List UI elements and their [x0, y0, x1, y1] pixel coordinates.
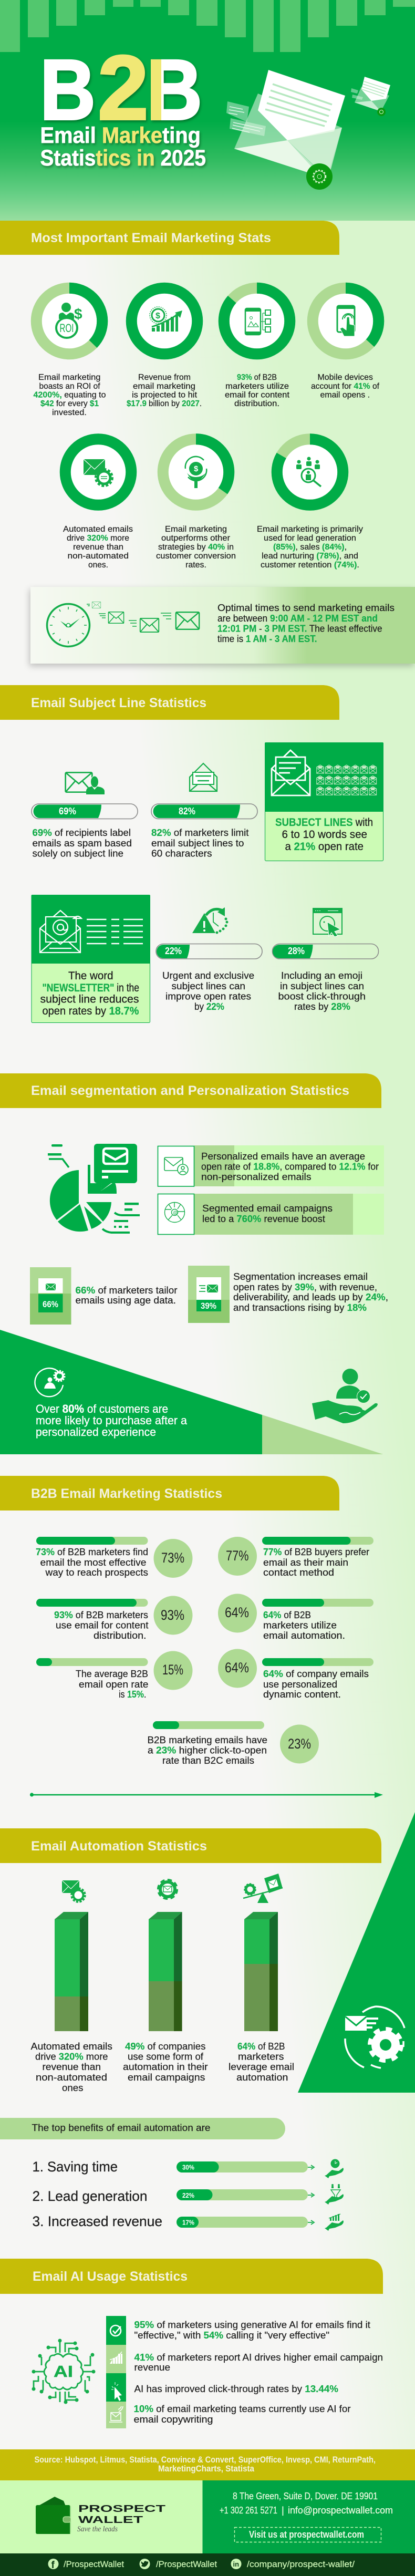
text [202, 1203, 333, 1224]
title: 2 [98, 36, 149, 139]
text [127, 373, 202, 408]
stat: 69% spam [32, 772, 138, 858]
stat: 15% open rate: is 15%. [119, 1689, 146, 1700]
callout: optimal send times [30, 587, 415, 664]
benefit: lead generation [33, 2184, 344, 2205]
heading: most important stats: Most Important Email Marketing Stats [31, 231, 271, 245]
stat: 73% reach prospects: email the most effective [40, 1557, 146, 1568]
text [156, 525, 236, 570]
text: 12:01 PM - 3 PM EST. The least effective [217, 623, 382, 634]
icon: ROI person [56, 303, 82, 338]
stat: 64% automation: marketers utilize [263, 1620, 337, 1631]
stat: 15% open rate: The average B2B [76, 1669, 148, 1679]
text: open rate of 18.8%, compared to 12.1% for [201, 1161, 379, 1172]
icon: phone with nodes [245, 308, 271, 335]
text: non-automated [36, 2072, 107, 2083]
text: account for 41% of [311, 382, 380, 391]
icon: growth chart [110, 2352, 122, 2364]
text: outperforms other [161, 534, 231, 543]
heading: segmentation: Email segmentation and Personalization Statistics [31, 1083, 349, 1098]
icon: coin and growth arrow: $ [155, 312, 160, 320]
icon: globe at sign [165, 1202, 185, 1222]
text: age data: 66% of marketers tailor [76, 1285, 178, 1296]
stat: 64% dynamic content: dynamic content. [263, 1689, 341, 1700]
text: Mobile devices [317, 373, 373, 382]
icon: envelope person [164, 1157, 188, 1175]
text: rates by 28% [294, 1001, 350, 1012]
text: emails as spam based [33, 838, 132, 849]
text [33, 827, 132, 858]
benefit: lead generation: 22% [182, 2191, 194, 2199]
icon: wallet logo [36, 2497, 71, 2534]
text [311, 373, 380, 399]
title: B [40, 42, 96, 138]
text: AI stats: AI has improved click-through rates by 13.44% [134, 2384, 338, 2394]
text: 82% of marketers limit [151, 827, 249, 838]
text: Email marketing [38, 373, 101, 382]
text: email marketing [133, 382, 195, 391]
donut stat: primary uses [257, 439, 363, 570]
text: 60 characters [151, 848, 212, 858]
text: in subject lines can [280, 981, 364, 991]
text: automation [236, 2072, 288, 2083]
text: Urgent and exclusive [162, 970, 254, 981]
text: improve open rates [165, 991, 251, 1001]
text: subject line reduces [40, 993, 139, 1006]
footer: social bar: /company/prospect-wallet/ [247, 2559, 355, 2569]
title: Statistics in 2025 [40, 146, 206, 171]
button: visit us [234, 2527, 381, 2542]
text: subject lines can [171, 981, 245, 991]
progress bar [151, 804, 257, 819]
text: email subject lines to [151, 838, 244, 849]
card: newsletter word [32, 895, 150, 1022]
footer: contact panel: 8 The Green, Suite D, Dover. DE 19901 [233, 2491, 378, 2501]
heading: most important stats [0, 221, 339, 255]
card: subject line length [265, 742, 383, 861]
text: lead nurturing (78%), and [262, 552, 358, 561]
icon: linkedin: in [233, 2560, 239, 2568]
banner: top benefits: The top benefits of email automation are [32, 2123, 210, 2133]
footer: logo panel [0, 2480, 203, 2553]
text [162, 970, 254, 1012]
icon: envelope gear [62, 1880, 85, 1902]
source bar [0, 2449, 415, 2480]
stat: 23% click-to-open: 23% [288, 1736, 311, 1752]
text: 49% of companies [125, 2041, 206, 2052]
text [123, 2041, 208, 2083]
chart: automation bar 3 [229, 1874, 294, 2083]
text: Segmented email campaigns [202, 1203, 333, 1214]
stat: 22% urgent [156, 907, 262, 1012]
stat card: 39% segmentation [188, 1266, 230, 1323]
stat: 93% content distribution: use email for content [56, 1620, 148, 1631]
stat: 77% buyers prefer: email as their main [263, 1557, 348, 1568]
progress bar: 82% [179, 806, 195, 816]
text: personalized experience [36, 1425, 156, 1439]
stat: 64% dynamic content: 64% [225, 1660, 249, 1675]
text [40, 969, 139, 1017]
logo wordmark: WALLET [78, 2515, 143, 2525]
text: 93% of B2B [237, 373, 277, 382]
icon: coin and growth arrow [150, 307, 182, 332]
text: age data [76, 1285, 178, 1306]
text: email for content [225, 391, 290, 399]
text: The word [68, 969, 113, 982]
text: is projected to hit [132, 391, 198, 399]
progress bar [272, 944, 378, 959]
icon: large envelope [272, 750, 310, 795]
text: non-personalized emails [201, 1172, 311, 1182]
stat: 64% automation: email automation. [263, 1630, 345, 1641]
text: by 22% [194, 1001, 224, 1012]
stat: 93% content distribution: 93% of B2B marketers [54, 1610, 148, 1620]
icon: ROI person: ROI [60, 322, 74, 335]
text: boasts an ROI of [39, 382, 100, 391]
text: leverage email [229, 2062, 294, 2072]
text: Automated emails [63, 525, 133, 534]
text: open rates by 18.7% [42, 1005, 139, 1017]
text: 69% of recipients label [33, 827, 131, 838]
heading: AI usage [0, 2259, 383, 2294]
chart: automation bar 1 [30, 1880, 112, 2093]
benefit: saving time: 1. Saving time [33, 2159, 118, 2175]
icon: open envelope [190, 763, 217, 791]
heading: subject line [0, 685, 339, 720]
stat: 28% emoji [272, 908, 378, 1012]
heading: subject line: Email Subject Line Statistics [31, 696, 206, 710]
benefit: lead generation: 2. Lead generation [33, 2188, 147, 2204]
heading: B2B statistics [0, 1476, 339, 1511]
title: B [147, 42, 202, 138]
icon: grid of envelopes [316, 764, 378, 795]
text: solely on subject line [33, 848, 123, 858]
text: Email marketing is primarily [257, 525, 363, 534]
text: strategies by 40% in [158, 543, 234, 552]
icon: envelope broadcast [109, 2406, 123, 2422]
stat: 15% open rate: email open rate [79, 1679, 148, 1690]
title: Email Marketing [40, 123, 201, 148]
icon: hand and chart [325, 2214, 344, 2231]
illustration: pie chart and message [48, 1144, 140, 1233]
logo wordmark: PROSPECT [78, 2503, 165, 2514]
stat: 23% click-to-open: a 23% higher click-to-open [148, 1745, 267, 1756]
stat: 23% click-to-open: B2B marketing emails have [147, 1735, 267, 1745]
icon: funnel coin: $ [194, 464, 199, 473]
text: AI stats: email copywriting [133, 2414, 213, 2425]
text [201, 1151, 379, 1182]
text: age data: emails using age data. [76, 1295, 176, 1306]
stat: 15% open rate: 15% [162, 1662, 183, 1678]
footer: social bar: /ProspectWallet [156, 2559, 217, 2569]
text: drive 320% more [35, 2052, 108, 2062]
footer: contact panel [203, 2480, 415, 2553]
footer: social bar: /ProspectWallet [64, 2559, 124, 2569]
icon: AI brain circuit [32, 2339, 96, 2404]
text: marketers utilize [225, 382, 289, 391]
button: visit us: Visit us at prospectwallet.com [249, 2529, 364, 2540]
arrow [30, 1792, 383, 1798]
progress bar [156, 944, 262, 959]
icon: globe at sign: @ [173, 1210, 178, 1215]
icon: hand and clock [325, 2159, 344, 2178]
icon: person and gear [35, 1368, 65, 1396]
text: 6 to 10 words see [282, 828, 367, 841]
heading: automation [0, 1828, 381, 1863]
icon: facebook [48, 2559, 59, 2571]
benefit: increased revenue [33, 2213, 344, 2231]
strip: AI stat icons [106, 2316, 126, 2428]
stat: 64% automation: 64% of B2B [263, 1610, 311, 1620]
donut stat: conversion [156, 439, 236, 570]
text: led to a 760% revenue boost [202, 1214, 325, 1224]
icon: facebook: f [51, 2560, 55, 2571]
icon: AI brain circuit: AI [54, 2362, 73, 2381]
icon: ROI person: $ [74, 306, 82, 322]
text: marketers [238, 2052, 284, 2062]
stat: 93% content distribution: distribution. [94, 1630, 146, 1641]
stat: 73% reach prospects: 73% of B2B marketers find [36, 1547, 148, 1557]
text: invested. [52, 408, 87, 417]
progress bar: 28% [288, 946, 305, 956]
text: time is 1 AM - 3 AM EST. [217, 634, 317, 644]
footer: contact panel: | [282, 2505, 284, 2516]
text: Personalized emails have an average [201, 1151, 365, 1162]
donut stat: mobile [311, 288, 380, 399]
icon: clock [47, 604, 89, 646]
text: boost click-through [278, 991, 366, 1001]
icon: envelope [46, 1284, 56, 1290]
text: Optimal times to send marketing emails [217, 603, 395, 613]
text [34, 373, 106, 417]
benefit: increased revenue: 3. Increased revenue [33, 2213, 162, 2229]
benefit: increased revenue: 17% [182, 2218, 194, 2227]
text: $17.9 billion by 2027. [127, 399, 202, 408]
logo wordmark [77, 2503, 165, 2533]
icon: flying envelopes [87, 602, 199, 632]
text: segmentation lift: deliverability, and leads up by 24%, [233, 1292, 388, 1302]
icon: twitter [140, 2559, 150, 2569]
stat: 77% buyers prefer [218, 1537, 374, 1578]
icon: phone touch [337, 306, 355, 336]
text: segmentation lift: and transactions rising by 18% [233, 1302, 367, 1313]
text: customer conversion [156, 552, 236, 561]
heading: B2B statistics: B2B Email Marketing Statistics [31, 1486, 222, 1501]
icon: lines and envelope [207, 1285, 218, 1292]
text: a 21% open rate [285, 840, 364, 853]
text: non-automated [67, 552, 129, 561]
stat card: 39% segmentation: 39% [201, 1301, 216, 1311]
stat: 73% reach prospects [36, 1537, 192, 1578]
illustration: open envelope [226, 70, 390, 190]
text: Email marketing [165, 525, 227, 534]
stat: 64% automation [218, 1594, 374, 1641]
text: SUBJECT LINES with [275, 816, 373, 829]
benefit: saving time: 30% [182, 2164, 194, 2171]
benefit: saving time [33, 2159, 344, 2178]
stat: 77% buyers prefer: contact method [263, 1567, 334, 1578]
text: AI stats: revenue [134, 2362, 170, 2373]
text: AI stats: 95% of marketers using generative AI for emails find it [134, 2320, 370, 2330]
chart: automation bar 2 [123, 1880, 208, 2083]
progress bar: 69% [59, 806, 76, 816]
text: segmentation lift: open rates by 39%, with revenue, [233, 1282, 377, 1292]
text [229, 2041, 294, 2083]
icon: gear with envelope [159, 1880, 177, 1898]
stat: 77% buyers prefer: 77% [226, 1548, 249, 1564]
heading: segmentation [0, 1073, 381, 1108]
text: distribution. [234, 399, 279, 408]
progress bar [32, 804, 138, 819]
text: AI stats: 41% of marketers report AI drives higher email campaign [134, 2352, 383, 2363]
icon: click cursor [111, 2382, 122, 2401]
text: ones. [88, 561, 108, 570]
stat: 73% reach prospects: 73% [161, 1550, 184, 1566]
stat: 64% dynamic content: 64% of company emails [263, 1669, 369, 1679]
title [40, 36, 206, 171]
footer: contact panel: info@prospectwallet.com [288, 2505, 393, 2516]
text: revenue than [73, 543, 123, 552]
text [36, 1402, 188, 1439]
text [278, 970, 366, 1012]
text: rates. [185, 561, 206, 570]
text [151, 827, 249, 858]
stat: 64% automation: 64% [225, 1605, 249, 1620]
icon: funnel coin [185, 457, 206, 488]
icon: envelope and gear [345, 2006, 404, 2068]
stat: 73% reach prospects: way to reach prospects [45, 1567, 148, 1578]
text: (85%), sales (84%), [273, 543, 347, 552]
icon: at envelope and lines [40, 911, 143, 953]
text: Over 80% of customers are [36, 1402, 168, 1415]
stat: 82% characters [151, 763, 257, 858]
text: AI stats: 10% of email marketing teams currently use AI for [133, 2404, 351, 2414]
text: AI stats: "effective," with 54% calling it "very effective" [134, 2330, 329, 2341]
decorative bars [0, 0, 415, 52]
stat: 93% content distribution: 93% [161, 1607, 184, 1623]
stat: 23% click-to-open: rate than B2C emails [162, 1755, 254, 1766]
text: 4200%, equating to [34, 391, 106, 399]
hero header [0, 0, 415, 221]
text: segmentation lift [233, 1271, 388, 1313]
text: Revenue from [138, 373, 191, 382]
icon: envelope and gear [84, 459, 112, 486]
text [63, 525, 133, 570]
text: automation in their [123, 2062, 208, 2072]
stat: 64% dynamic content: use personalized [263, 1679, 337, 1690]
stat: 15% open rate [36, 1651, 192, 1700]
icon: linkedin [231, 2559, 242, 2569]
text: 64% of B2B [237, 2041, 285, 2052]
text: customer retention (74%). [261, 561, 359, 570]
text: "NEWSLETTER" in the [42, 981, 139, 994]
panel: automation triangle [298, 1812, 415, 2093]
donut stat: revenue [127, 288, 202, 408]
icon: warning clock [192, 907, 228, 934]
text: used for lead generation [264, 534, 356, 543]
text: $42 for every $1 [40, 399, 99, 408]
progress bar: 22% [165, 946, 182, 956]
text: ones [62, 2083, 83, 2093]
icon: browser with cursor [313, 908, 342, 937]
heading: AI usage: Email AI Usage Statistics [33, 2269, 188, 2284]
stat: 64% dynamic content [218, 1649, 374, 1700]
callout: segmented campaigns [158, 1194, 384, 1235]
text: email campaigns [128, 2072, 205, 2083]
heading: automation: Email Automation Statistics [31, 1839, 207, 1854]
donut stat: automated emails [63, 439, 133, 570]
text: use some form of [128, 2052, 204, 2062]
text [257, 525, 363, 570]
icon: hand and funnel [325, 2184, 344, 2205]
text: email opens . [320, 391, 370, 399]
panel: personalized experience triangle [0, 1330, 383, 1454]
stat: 23% click-to-open [147, 1721, 319, 1766]
icon: people and magnifier [296, 457, 321, 487]
stat: 93% content distribution [36, 1596, 192, 1641]
text [217, 603, 395, 644]
footer: contact panel: +1 302 261 5271 [220, 2505, 277, 2516]
text: segmentation lift: Segmentation increases email [233, 1271, 368, 1282]
footer: social bar [0, 2553, 415, 2576]
text: AI stats [133, 2320, 383, 2425]
donut stat: ROI [34, 288, 106, 417]
text [30, 2041, 112, 2093]
logo wordmark: Save the leads [77, 2525, 118, 2533]
text: Including an emoji [281, 970, 362, 981]
text: are between 9:00 AM - 12 PM EST and [217, 613, 378, 624]
stat card: 66% age [30, 1267, 71, 1325]
donut stat: content distribution [224, 288, 290, 408]
text: drive 320% more [67, 534, 129, 543]
icon: hand holding person [312, 1369, 378, 1423]
callout: personalized open rate [158, 1145, 384, 1186]
text [275, 816, 373, 853]
banner: top benefits [0, 2118, 285, 2139]
text [225, 373, 290, 408]
text: Automated emails [30, 2041, 112, 2052]
text: more likely to purchase after a [36, 1414, 188, 1427]
icon: envelope with person [66, 772, 105, 794]
stat card: 66% age: 66% [43, 1299, 58, 1309]
source bar: MarketingCharts, Statista [158, 2464, 254, 2474]
stat: 77% buyers prefer: 77% of B2B buyers prefer [263, 1547, 369, 1557]
icon: check cycle [110, 2325, 121, 2336]
icon: scale with envelope [243, 1874, 283, 1903]
text: revenue than [42, 2062, 101, 2072]
